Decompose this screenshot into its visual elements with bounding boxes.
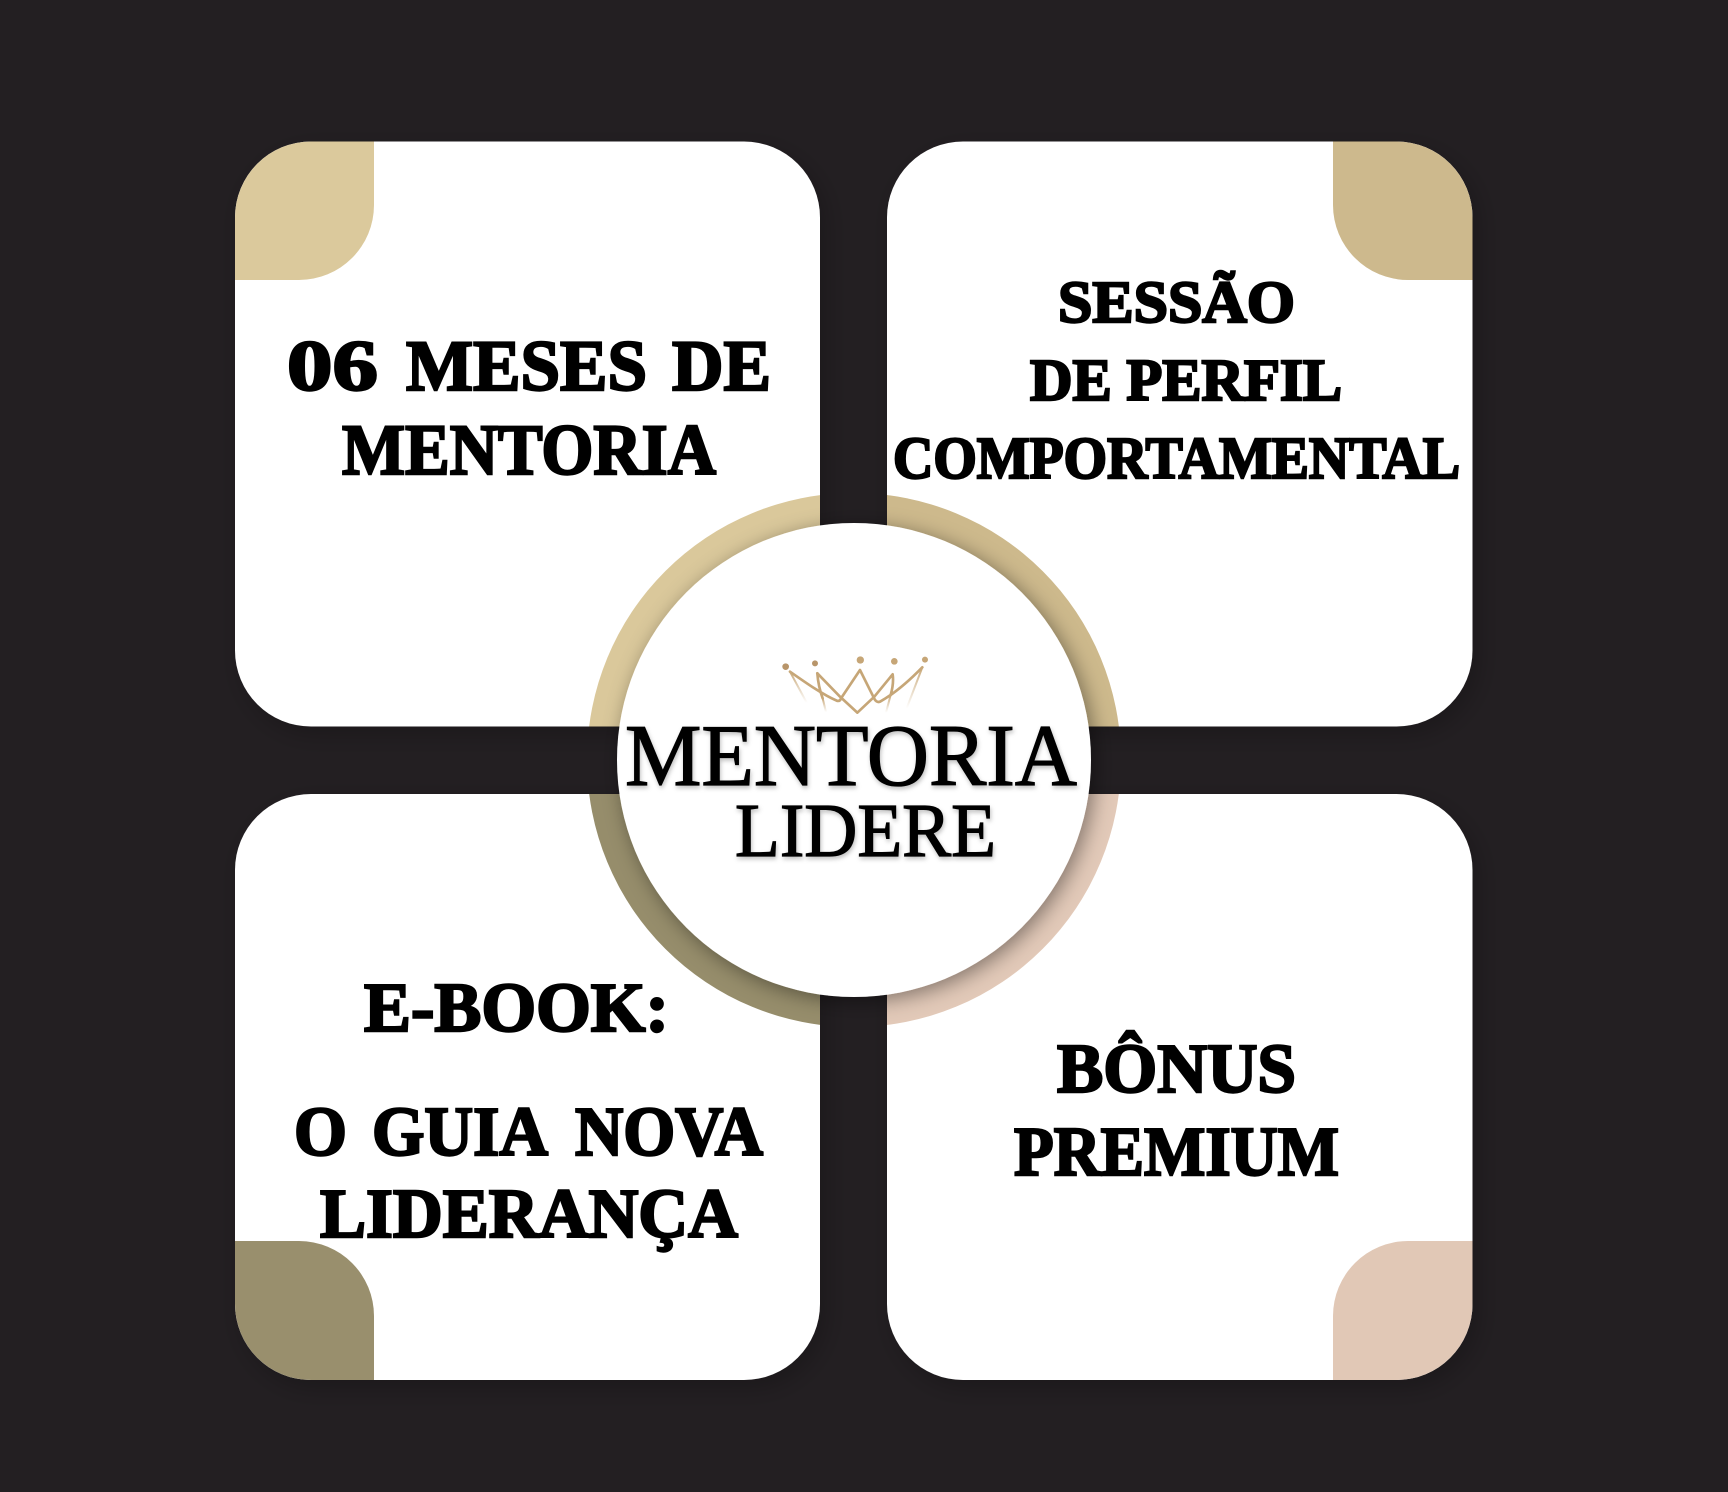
heading: sessão de perfil comportamental: DE PERFIL — [1030, 347, 1342, 413]
heading: e-book o guia nova liderança: GUIA — [372, 1094, 548, 1171]
ring segment: top-left — [589, 495, 820, 726]
heading: e-book o guia nova liderança — [294, 970, 763, 1253]
heading: sessão de perfil comportamental: COMPORTAMENTAL — [893, 425, 1460, 491]
panel: e-book o guia nova liderança — [235, 794, 820, 1380]
accent: bottom-right corner — [1333, 1241, 1473, 1380]
title: mentoria lidere — [625, 708, 1077, 873]
heading: e-book o guia nova liderança: O — [294, 1094, 347, 1171]
ring segment: bottom-left — [589, 794, 820, 1025]
accent: bottom-left corner — [235, 1241, 374, 1380]
center circle logo — [617, 523, 1091, 997]
heading: bônus premium: PREMIUM — [1014, 1114, 1339, 1191]
heading: sessão de perfil comportamental: SESSÃO — [1058, 269, 1295, 335]
heading: 06 meses de mentoria: MENTORIA — [342, 410, 716, 490]
accent: top-left corner — [235, 141, 374, 280]
icon: crown — [782, 656, 928, 713]
heading: 06 meses de mentoria: DE — [672, 326, 771, 406]
heading: bônus premium: BÔNUS — [1057, 1031, 1296, 1108]
ring segment: bottom-right — [887, 794, 1119, 1025]
heading: 06 meses de mentoria — [287, 326, 771, 490]
panel: sessão de perfil comportamental — [887, 142, 1472, 726]
title: mentoria lidere: LIDERE — [735, 789, 996, 873]
title: mentoria lidere: MENTORIA — [625, 708, 1077, 805]
ring segment: top-right — [887, 495, 1119, 726]
heading: e-book o guia nova liderança: E-BOOK: — [364, 970, 669, 1047]
heading: e-book o guia nova liderança: LIDERANÇA — [320, 1176, 738, 1253]
heading: sessão de perfil comportamental — [893, 269, 1460, 491]
heading: 06 meses de mentoria: MESES — [406, 326, 647, 406]
heading: bônus premium — [1014, 1031, 1339, 1191]
panel: bônus premium — [887, 794, 1472, 1380]
panel: 06 meses de mentoria — [235, 142, 820, 726]
accent: top-right corner — [1333, 141, 1473, 280]
heading: 06 meses de mentoria: 06 — [287, 326, 378, 406]
heading: e-book o guia nova liderança: NOVA — [575, 1094, 763, 1171]
